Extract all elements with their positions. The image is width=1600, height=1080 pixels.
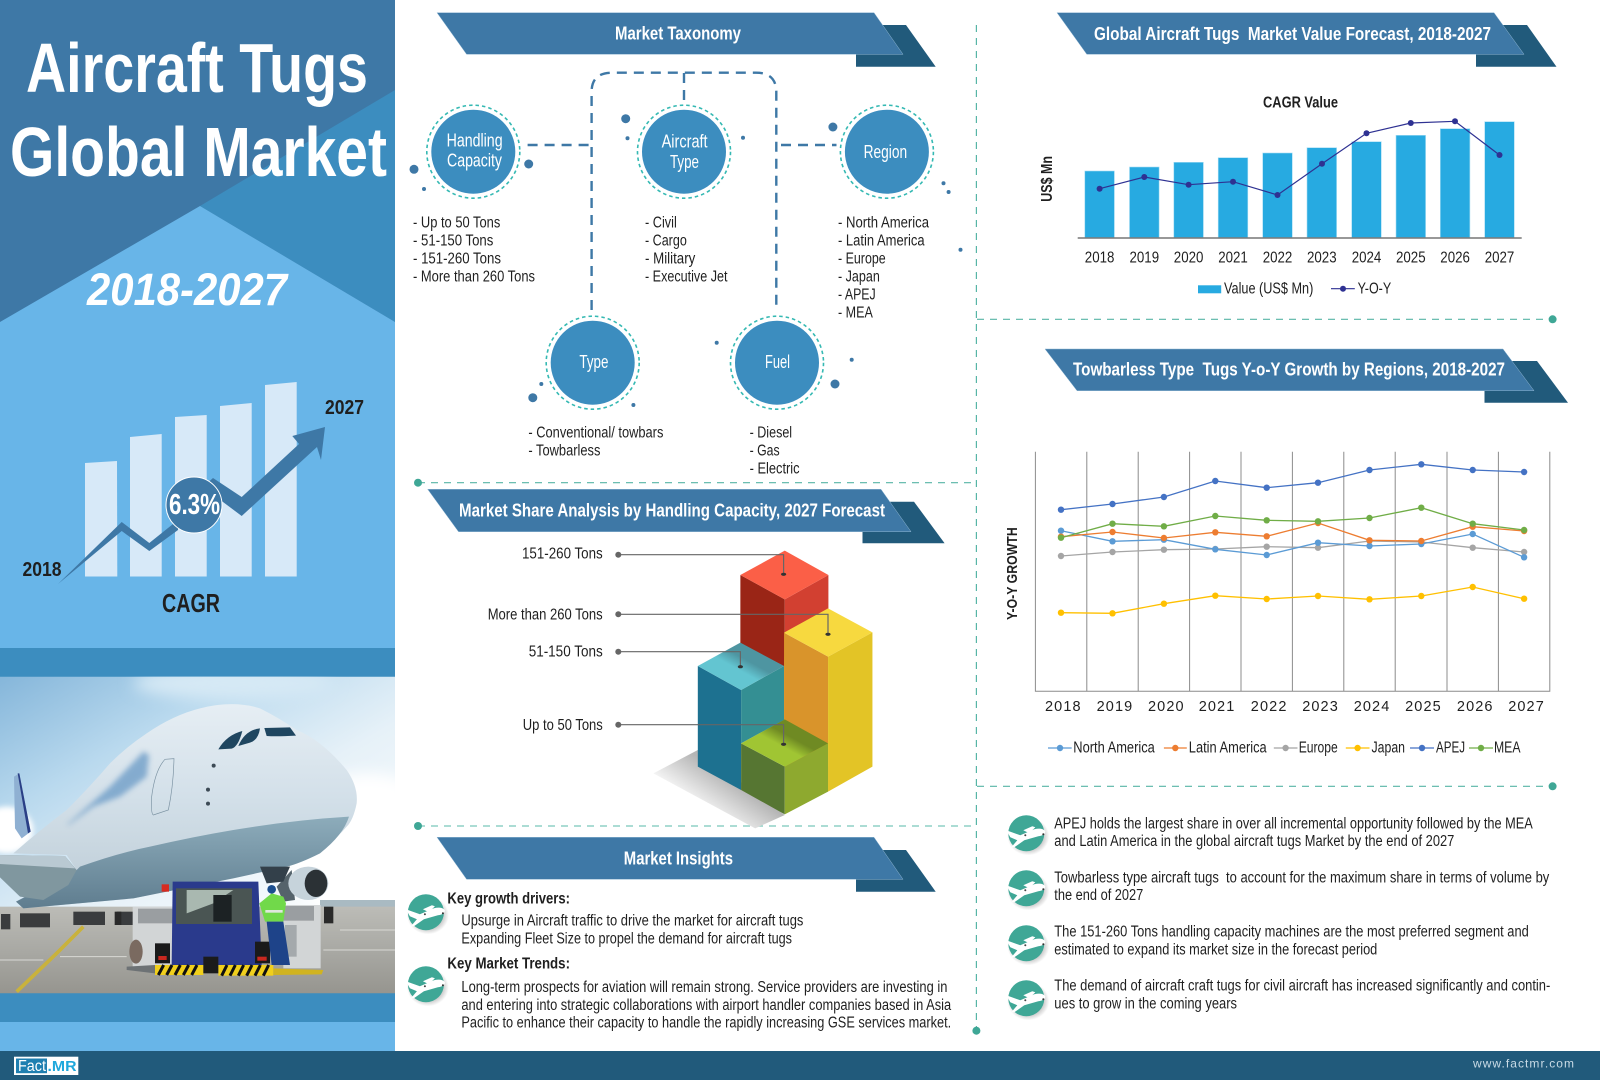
decorative dots: taxonomy — [410, 114, 962, 407]
Y-O-Y line — [1097, 118, 1502, 198]
list: aircraft type: - Executive Jet — [645, 268, 728, 285]
chart: isometric market share blocks — [653, 551, 872, 828]
year labels: 2027 — [1508, 699, 1544, 715]
banner: Market Insights — [437, 837, 936, 892]
legend — [1198, 280, 1391, 297]
callout: 51-150 Tons: 51-150 Tons — [529, 644, 603, 661]
node: Handling Capacity: Handling — [447, 131, 503, 151]
year labels: 2021 — [1218, 250, 1248, 267]
photo: aircraft and tug — [0, 676, 395, 994]
node: Fuel: Fuel — [765, 352, 790, 372]
series: APEJ — [1058, 461, 1527, 513]
text: insight civil aircraft: ues to grow in the coming years — [1054, 995, 1237, 1012]
year labels: 2023 — [1307, 250, 1337, 267]
list: aircraft type: - Cargo — [645, 232, 687, 249]
node: Type — [546, 316, 639, 409]
list: type: - Towbarless — [528, 442, 601, 459]
year labels — [1085, 250, 1514, 267]
list: handling capacity: - 151-260 Tons — [413, 250, 501, 267]
icon: plane badge — [1006, 980, 1049, 1020]
text: key growth drivers: Expanding Fleet Size to propel the demand for aircraft tugs — [461, 930, 792, 947]
icon: plane badge — [1006, 815, 1049, 855]
text: insight Towbarless: the end of 2027 — [1054, 887, 1143, 904]
legend: APEJ — [1436, 739, 1465, 756]
legend: Europe — [1299, 739, 1338, 756]
banner: Market Taxonomy — [437, 13, 936, 67]
year labels: 2027 — [1485, 250, 1514, 267]
text: key growth drivers: Upsurge in Aircraft traffic to drive the market for aircraft tugs — [461, 912, 804, 929]
worker — [259, 885, 290, 965]
series: MEA — [1058, 504, 1527, 541]
list: fuel: - Diesel — [750, 424, 792, 441]
series: Japan — [1058, 584, 1527, 616]
text: insight civil aircraft — [1054, 977, 1550, 1012]
block: Up to 50 Tons — [741, 719, 828, 814]
banner: Towbarless Y-o-Y Growth: Towbarless Type Tugs Y-o-Y Growth by Regions, 2018-2027 — [1073, 359, 1505, 380]
icon: plane badge — [406, 894, 449, 934]
list: handling capacity: - Up to 50 Tons — [413, 214, 500, 231]
year labels: 2018 — [1045, 699, 1081, 715]
chart: regional Y-o-Y growth lines — [1004, 452, 1550, 756]
list: fuel: - Electric — [750, 460, 800, 477]
title: Aircraft Tugs — [26, 29, 368, 107]
icon: plane badge — [1006, 870, 1049, 910]
website url: www.factmr.com — [1472, 1057, 1574, 1071]
block: 51-150 Tons — [698, 643, 784, 790]
list: region: - Europe — [838, 250, 886, 267]
text: insight Towbarless — [1054, 869, 1550, 904]
year labels: 2024 — [1352, 250, 1382, 267]
landing gear — [1, 912, 135, 929]
callout: Up to 50 Tons: Up to 50 Tons — [523, 717, 603, 734]
chart title: CAGR Value — [1263, 95, 1338, 112]
text: key growth drivers: Key growth drivers: — [447, 890, 570, 907]
text: key market trends: Key Market Trends: — [447, 955, 570, 972]
title: Global Market — [10, 113, 387, 191]
node: Region — [840, 105, 933, 198]
list: handling capacity: - 51-150 Tons — [413, 232, 494, 249]
block: More than 260 Tons — [784, 608, 872, 792]
title — [10, 29, 387, 191]
block: 151-260 Tons — [740, 551, 828, 667]
banner: Market Taxonomy: Market Taxonomy — [615, 22, 742, 44]
text: key market trends: and entering into strategic collaborations with airport handler companies based in Asia — [461, 997, 952, 1014]
logo: Fact.MR — [14, 1057, 78, 1075]
banner: Towbarless Y-o-Y Growth — [1045, 349, 1568, 403]
chart: market value bars with Y-O-Y line — [1039, 95, 1522, 297]
list: aircraft type: - Civil — [645, 214, 677, 231]
icon: plane badge — [1006, 925, 1049, 965]
tug vehicle — [115, 882, 333, 976]
logo: Fact.MR: Fact — [18, 1058, 47, 1075]
list: region: - Japan — [838, 268, 880, 285]
arrow: growth trend — [58, 427, 325, 584]
node: Region: Region — [864, 142, 907, 162]
legend: North America — [1073, 739, 1155, 756]
banner: Global Market Value Forecast — [1057, 13, 1556, 67]
list: region — [838, 214, 929, 321]
series: Latin America — [1058, 520, 1527, 544]
year labels: 2020 — [1148, 699, 1184, 715]
year labels: 2022 — [1251, 699, 1286, 715]
year labels: 2024 — [1354, 699, 1389, 715]
year labels: 2026 — [1440, 250, 1470, 267]
list: region: - APEJ — [838, 286, 876, 303]
list: aircraft type — [645, 214, 728, 285]
chart: CAGR growth bars and arrow: 2018 — [22, 559, 62, 581]
text: key growth drivers — [447, 890, 804, 947]
list: handling capacity: - More than 260 Tons — [413, 268, 535, 285]
callout: 151-260 Tons: 151-260 Tons — [522, 545, 603, 562]
chart: CAGR growth bars and arrow: 2027 — [325, 397, 364, 419]
chart: CAGR growth bars and arrow: 6.3% — [169, 489, 220, 521]
text: insight APEJ — [1054, 815, 1533, 850]
fuselage — [13, 704, 357, 908]
banner: Market Share Analysis: Market Share Analysis by Handling Capacity, 2027 Forecast — [459, 500, 885, 521]
node: Aircraft Type — [638, 105, 730, 198]
chart: CAGR growth bars and arrow: CAGR — [162, 588, 220, 618]
series: North America — [1058, 528, 1527, 560]
engine — [277, 867, 328, 902]
text: insight handling capacity — [1054, 924, 1529, 958]
legend — [1048, 739, 1521, 756]
banner: Market Share Analysis — [428, 489, 945, 543]
text: key market trends: Pacific to enhance their capacity to handle the rapidly increasing GSE services market. — [461, 1014, 951, 1031]
legend: Value (US$ Mn) — [1224, 280, 1313, 297]
year labels: 2019 — [1097, 699, 1132, 715]
year labels: 2023 — [1302, 699, 1338, 715]
year labels: 2019 — [1130, 250, 1159, 267]
bars — [1085, 122, 1514, 238]
tail fin — [14, 773, 31, 838]
year labels: 2018 — [1085, 250, 1114, 267]
year labels: 2020 — [1174, 250, 1204, 267]
panel: left hero — [0, 0, 395, 1051]
text: key market trends — [447, 955, 952, 1031]
airline livery — [67, 752, 149, 825]
axis label: Y-O-Y GROWTH — [1004, 527, 1021, 620]
year labels — [1045, 699, 1544, 715]
chart: CAGR growth bars and arrow — [22, 382, 364, 618]
callout: Up to 50 Tons — [523, 717, 786, 746]
legend: Y-O-Y — [1358, 280, 1391, 297]
text: insight APEJ: and Latin America in the global aircraft tugs Market by the end of 2027 — [1054, 833, 1454, 850]
footer bar — [0, 1051, 1600, 1080]
list: type: - Conventional/ towbars — [528, 424, 664, 441]
logo: Fact.MR: .MR — [48, 1058, 77, 1075]
node: Type: Type — [579, 352, 608, 372]
list: fuel: - Gas — [750, 442, 780, 459]
list: type — [528, 424, 664, 459]
series: Europe — [1058, 538, 1527, 559]
list: region: - MEA — [838, 304, 873, 321]
list: aircraft type: - Military — [645, 250, 696, 267]
axis label: US$ Mn — [1039, 156, 1056, 202]
legend: MEA — [1494, 739, 1521, 756]
icon: plane badge — [406, 966, 449, 1006]
callout: 151-260 Tons — [522, 545, 786, 576]
legend: Latin America — [1189, 739, 1267, 756]
year labels: 2022 — [1263, 250, 1292, 267]
subtitle: year range: 2018-2027 — [86, 264, 289, 315]
callout: More than 260 Tons: More than 260 Tons — [488, 606, 603, 623]
node: Handling Capacity: Capacity — [447, 151, 502, 171]
list: handling capacity — [413, 214, 535, 285]
year labels: 2025 — [1405, 699, 1441, 715]
callout: More than 260 Tons — [488, 606, 831, 636]
node: Fuel — [730, 316, 824, 409]
year labels: 2025 — [1396, 250, 1426, 267]
list: region: - North America — [838, 214, 929, 231]
banner: Global Market Value Forecast: Global Aircraft Tugs Market Value Forecast, 2018-2027 — [1094, 23, 1491, 44]
text: insight handling capacity: estimated to expand its market size in the forecast period — [1054, 941, 1377, 958]
fuselage belly — [16, 817, 349, 908]
list: fuel — [750, 424, 800, 477]
callout: 51-150 Tons — [529, 644, 743, 668]
year labels: 2026 — [1457, 699, 1492, 715]
cockpit windows — [218, 727, 296, 749]
legend: Japan — [1372, 739, 1405, 756]
node: Handling Capacity — [427, 105, 520, 198]
node: Aircraft Type: Type — [670, 152, 699, 172]
grid — [1035, 452, 1550, 691]
wing — [0, 855, 77, 900]
text: key market trends: Long-term prospects for aviation will remain strong. Service providers are investing in — [461, 979, 947, 996]
node: Aircraft Type: Aircraft — [662, 132, 708, 152]
diagram: taxonomy connectors — [528, 73, 836, 310]
year labels: 2021 — [1199, 699, 1234, 715]
list: region: - Latin America — [838, 232, 925, 249]
banner: Market Insights: Market Insights — [624, 847, 733, 868]
